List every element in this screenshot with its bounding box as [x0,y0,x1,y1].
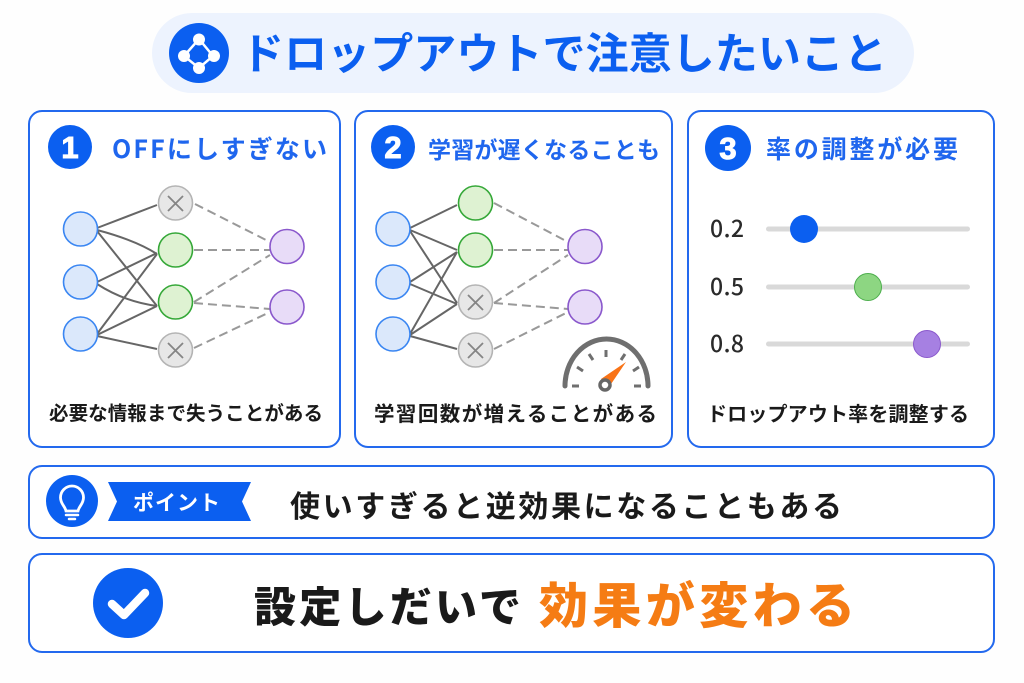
panel: conclusion [29,554,994,652]
ribbon label: ポイント [133,487,220,517]
number badge 3 [705,125,751,171]
panel: point [29,466,994,538]
number badge 1 [48,125,92,169]
icon: speedometer [565,339,648,390]
caption 3: ドロップアウト率を調整する [707,398,969,427]
slider 0.2 [710,210,970,244]
number badge 1: 1 [61,130,79,165]
title text: ドロップアウトで注意したいこと [241,20,887,82]
panel: slow learning [355,111,672,447]
slider 0.8: 0.8 [710,325,744,359]
network diagram 1 [64,186,304,367]
caption 1: 必要な情報まで失うことがある [49,397,323,426]
number badge 3: 3 [719,131,737,166]
conclusion text: 設定しだいで [254,574,521,635]
heading 3: 率の調整が必要 [766,130,958,166]
caption 2: 学習回数が増えることがある [374,397,657,427]
panel: rate tuning [688,111,994,447]
network diagram 2 [376,186,602,367]
icon: light bulb [46,475,98,527]
slider 0.5: 0.5 [710,268,744,302]
panel: OFF [29,111,340,447]
icon: check mark [93,568,163,638]
slider 0.8 [710,325,970,359]
slider 0.5 [710,268,970,302]
title banner [152,13,914,93]
icon: network [169,23,229,83]
heading 2: 学習が遅くなることも [428,131,660,165]
conclusion highlight: 効果が変わる [539,567,855,638]
number badge 2: 2 [384,130,402,165]
ribbon label [108,482,251,521]
heading 1: OFFにしすぎない [112,130,327,166]
slider 0.2: 0.2 [710,210,744,244]
number badge 2 [371,125,415,169]
point message: 使いすぎると逆効果になることもある [290,482,842,526]
